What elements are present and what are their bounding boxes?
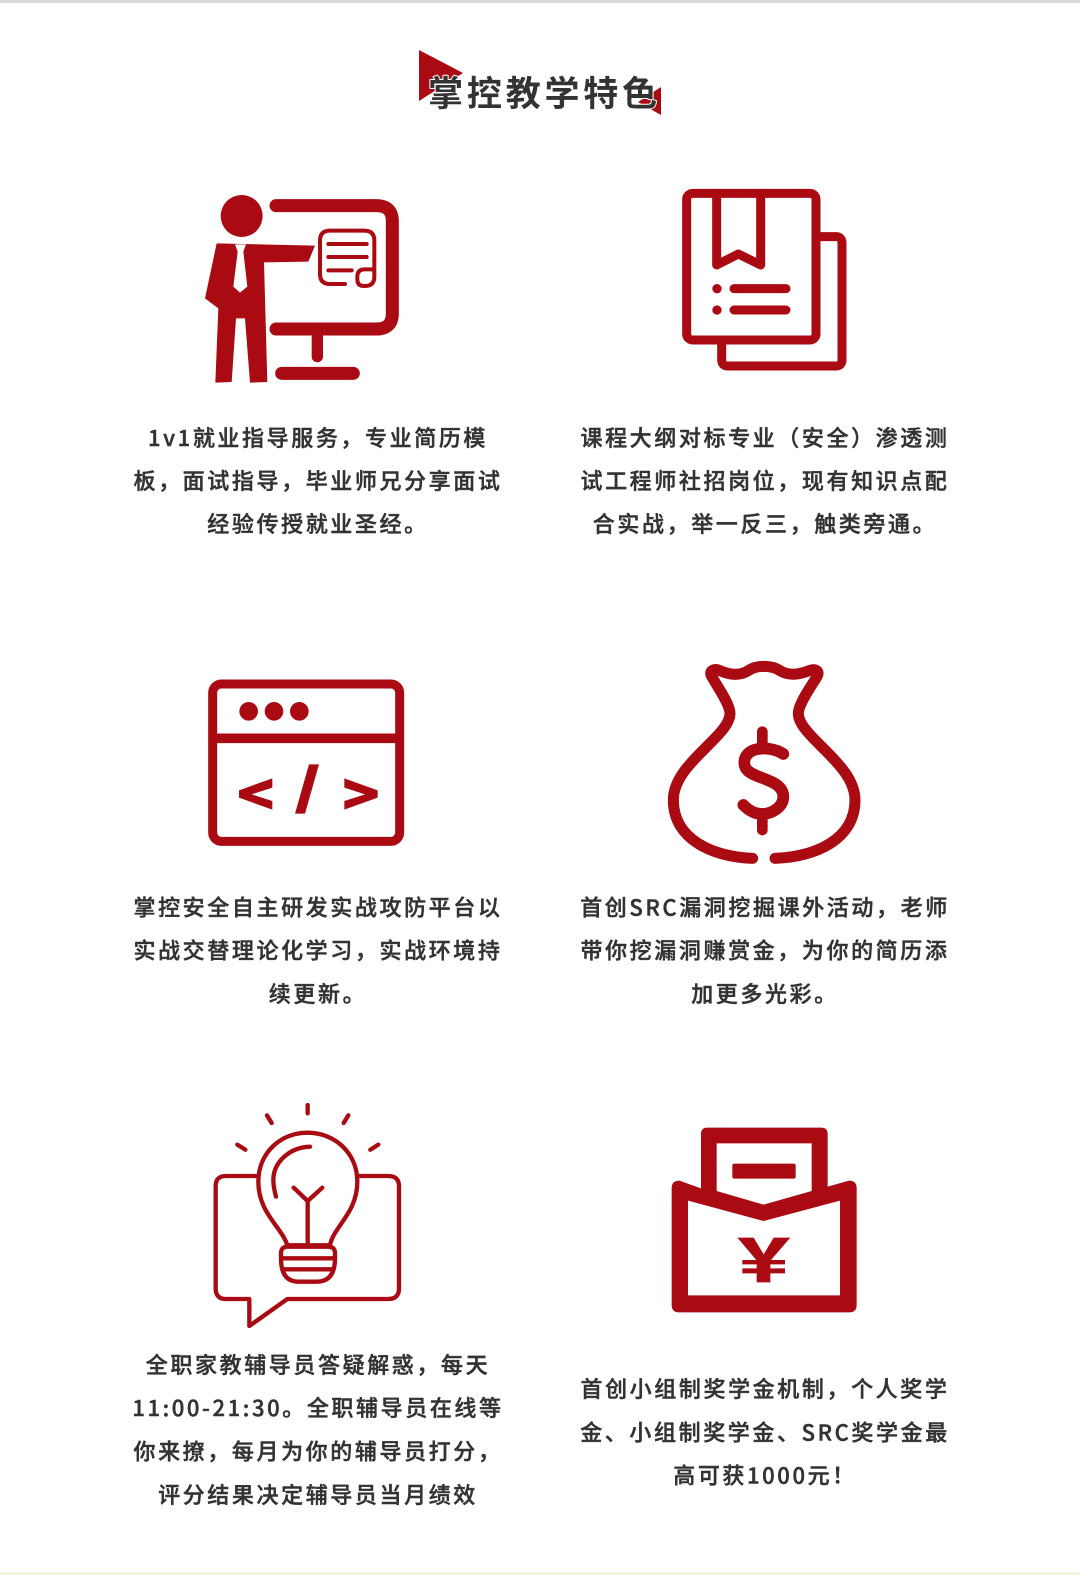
text: career guidance: 板，面试指导，毕业师兄分享面试 xyxy=(133,464,503,496)
text: full-time tutors: 全职家教辅导员答疑解惑，每天 xyxy=(146,1348,490,1380)
icon: red envelope with yen xyxy=(672,1128,857,1312)
icon: money bag xyxy=(673,666,855,858)
text: SRC bug bounty: 加更多光彩。 xyxy=(691,977,839,1009)
icon: book and document xyxy=(687,193,842,366)
text: SRC bug bounty: 带你挖漏洞赚赏金，为你的简历添 xyxy=(580,934,950,966)
text: practical platform: 掌控安全自主研发实战攻防平台以 xyxy=(133,890,503,922)
icon: light bulb in speech bubble xyxy=(216,1105,399,1326)
text: full-time tutors: 你来撩，每月为你的辅导员打分， xyxy=(133,1434,503,1466)
text: course outline: 课程大纲对标专业（安全）渗透测 xyxy=(580,421,950,453)
text: course outline: 合实战，举一反三，触类旁通。 xyxy=(593,507,937,539)
title with red triangles: 掌控教学特色 xyxy=(428,66,661,117)
text: full-time tutors xyxy=(132,1348,504,1510)
text: SRC bug bounty xyxy=(580,890,950,1009)
text: full-time tutors: 11:00-21:30。全职辅导员在线等 xyxy=(132,1391,504,1423)
text: scholarship: 首创小组制奖学金机制，个人奖学 xyxy=(580,1372,950,1404)
text: full-time tutors: 评分结果决定辅导员当月绩效 xyxy=(158,1478,478,1510)
text: career guidance xyxy=(133,421,503,539)
text: practical platform: 实战交替理论化学习，实战环境持 xyxy=(133,934,503,966)
icon: presenter at monitor xyxy=(205,195,392,383)
text: practical platform: 续更新。 xyxy=(269,977,367,1009)
text: SRC bug bounty: 首创SRC漏洞挖掘课外活动，老师 xyxy=(580,890,950,922)
text: scholarship: 金、小组制奖学金、SRC奖学金最 xyxy=(580,1416,950,1448)
text: course outline xyxy=(580,421,950,539)
text: career guidance: 1v1就业指导服务，专业简历模 xyxy=(148,421,488,453)
text: practical platform xyxy=(133,890,503,1009)
text: scholarship: 高可获1000元！ xyxy=(673,1458,857,1490)
text: scholarship xyxy=(580,1372,950,1490)
text: course outline: 试工程师社招岗位，现有知识点配 xyxy=(580,464,950,496)
icon: code window xyxy=(213,684,400,841)
text: career guidance: 经验传授就业圣经。 xyxy=(207,507,429,539)
